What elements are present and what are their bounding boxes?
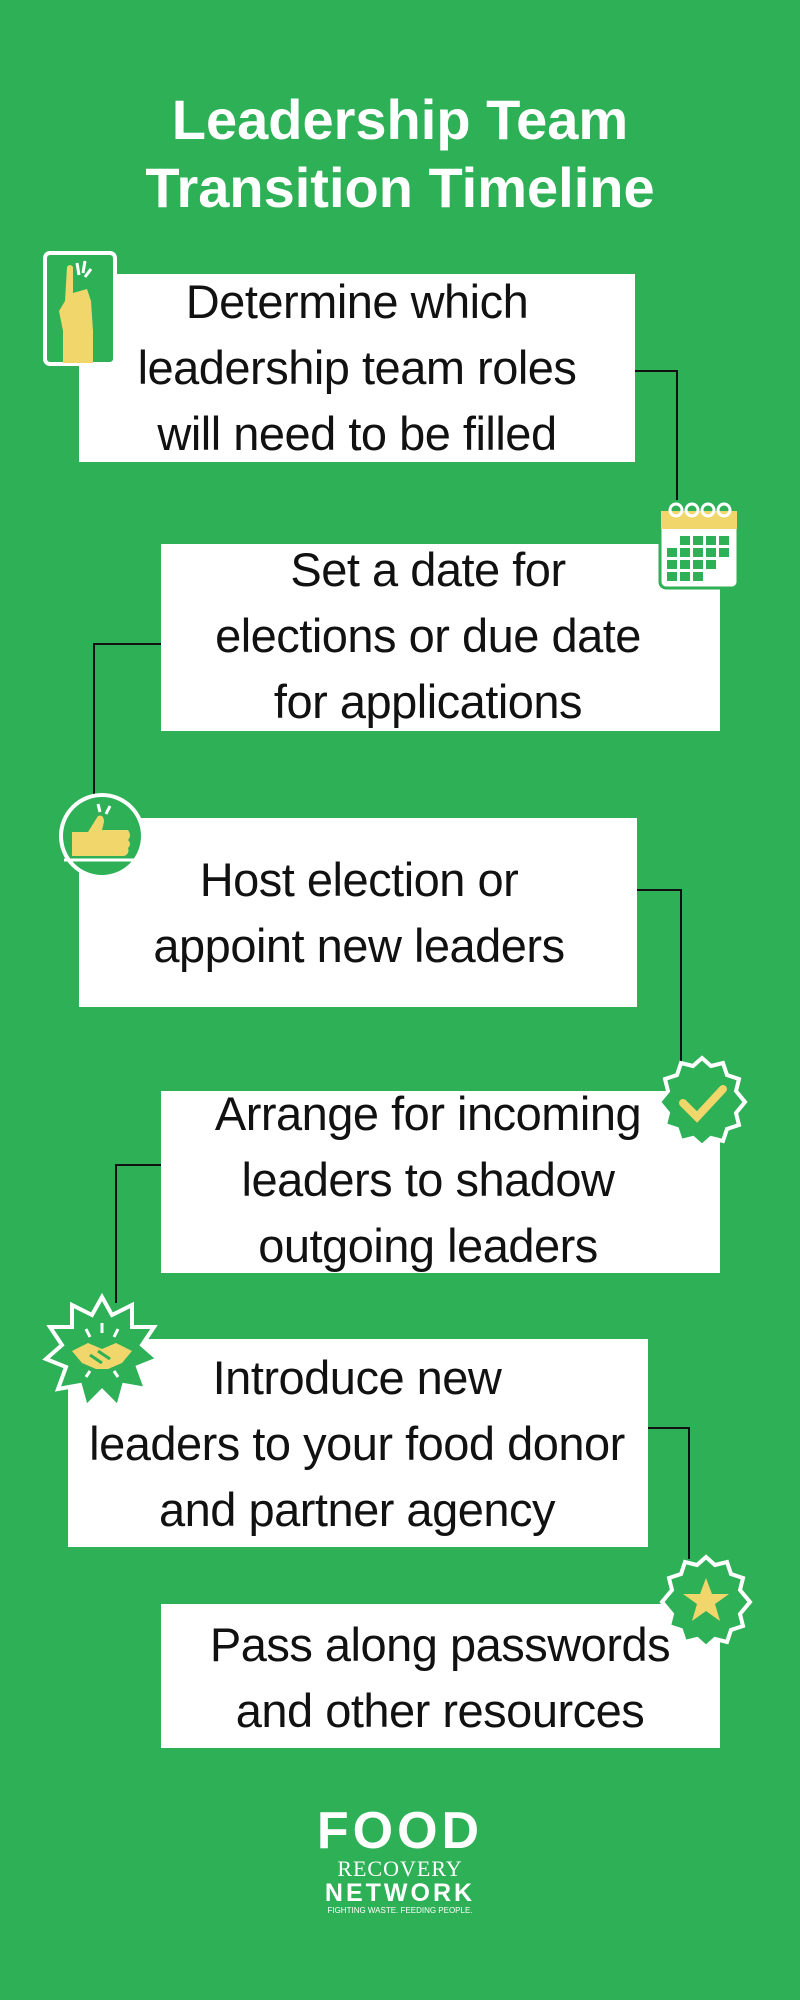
text: step 4: leaders to shadow [242,1153,614,1206]
text: step 4: Arrange for incoming [215,1087,641,1140]
text: step 5: and partner agency [159,1483,555,1536]
connector 4 [115,1164,163,1303]
text: step 4 [215,1087,641,1272]
title: Transition Timeline [145,156,655,219]
logo: Food Recovery Network: RECOVERY [337,1856,463,1881]
text: step 2: for applications [274,675,582,728]
panel: step 5 [68,1339,648,1547]
connector 3 [637,889,682,1061]
text: step 5: Introduce new [213,1351,501,1404]
title [145,88,655,219]
text: step 2: elections or due date [215,609,641,662]
text: step 5 [89,1351,625,1536]
logo: Food Recovery Network: FOOD [317,1802,483,1860]
logo: Food Recovery Network [317,1802,483,1915]
logo: Food Recovery Network: FIGHTING WASTE. FEEDING PEOPLE. [327,1906,473,1915]
icon: thumbs up [59,793,141,875]
icon: raised finger hand [43,251,117,366]
text: step 2: Set a date for [290,543,566,596]
text: step 4: outgoing leaders [258,1219,598,1272]
icon: calendar [658,502,737,590]
connector 5 [648,1427,690,1559]
text: step 3: appoint new leaders [153,919,565,972]
panel: step 3 [79,818,637,1007]
icon: handshake badge [42,1293,158,1403]
logo: Food Recovery Network: NETWORK [325,1879,475,1907]
text: step 2 [215,543,641,728]
text: step 3: Host election or [200,853,518,906]
text: step 6: and other resources [236,1684,644,1737]
text: step 1: Determine which [186,275,528,328]
text: step 1: leadership team roles [138,341,576,394]
icon: star badge [660,1554,752,1644]
text: step 1 [138,275,576,460]
panel: step 1 [79,274,635,462]
icon: check badge [662,1056,748,1144]
text: step 6: Pass along passwords [210,1618,670,1671]
connector 2 [93,643,163,799]
panel: step 4 [161,1091,720,1273]
panel: step 6 [161,1604,720,1748]
title: Leadership Team [172,88,628,151]
text: step 3 [153,853,565,972]
connector 1 [635,370,678,500]
panel: step 2 [161,544,720,731]
text: step 5: leaders to your food donor [89,1417,625,1470]
text: step 6 [210,1618,670,1737]
text: step 1: will need to be filled [157,407,557,460]
